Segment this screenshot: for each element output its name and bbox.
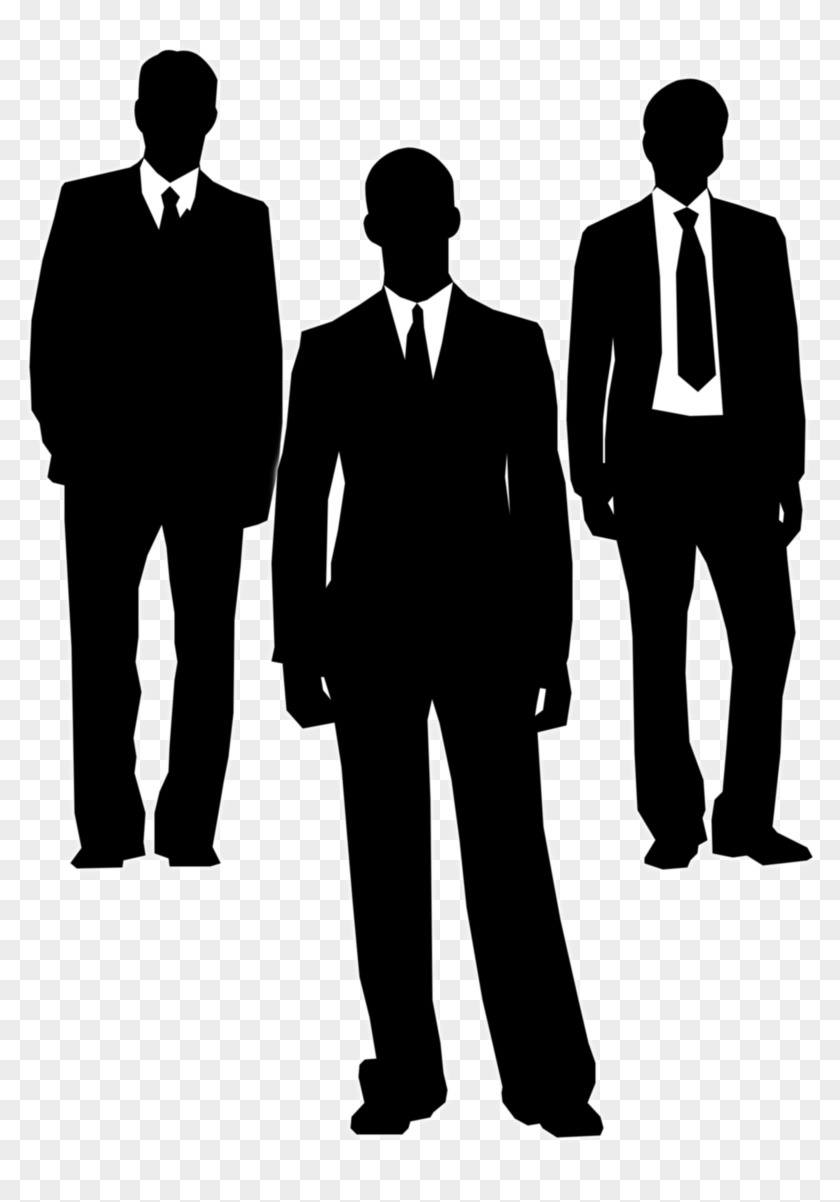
left man silhouette <box>30 51 282 868</box>
centre man shirt right side <box>417 282 453 380</box>
centre man silhouette <box>272 148 603 1137</box>
figure: centre man <box>272 148 603 1137</box>
centre man left hand gap <box>321 677 331 700</box>
right man silhouette <box>567 79 812 869</box>
left man shirt collar <box>140 158 199 230</box>
right man sleeve gap <box>603 337 615 463</box>
right man right hand gap <box>779 502 784 523</box>
centre man left waist gap <box>326 451 345 588</box>
figure: left man <box>30 51 282 868</box>
left man tie <box>159 186 180 240</box>
figure: right man <box>567 79 812 869</box>
right man left hand gap <box>608 496 614 515</box>
centre man shirt left side <box>384 285 417 360</box>
centre man right hand gap <box>535 688 546 716</box>
right man shirt <box>652 187 723 416</box>
centre man right waist gap <box>505 453 510 515</box>
right man tie <box>673 207 716 392</box>
